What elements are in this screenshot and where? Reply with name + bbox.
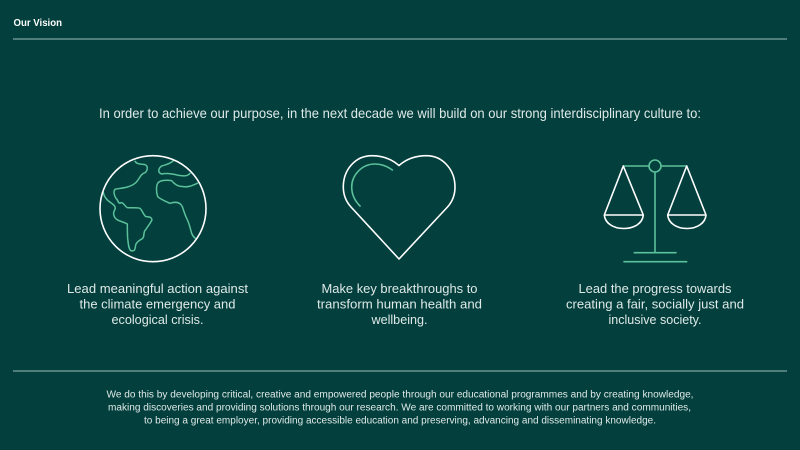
caption: climate: Lead meaningful action against bbox=[67, 281, 248, 296]
caption: climate bbox=[67, 281, 248, 327]
closing paragraph: to being a great employer, providing accessible education and preserving, advancing and disseminating knowledge. bbox=[144, 416, 656, 426]
icon: heart bbox=[343, 156, 455, 259]
caption: health bbox=[317, 281, 482, 327]
caption: society bbox=[566, 281, 744, 327]
closing paragraph: making discoveries and providing solutions through our research. We are committed to working with our partners and communities, bbox=[108, 402, 691, 414]
caption: society: inclusive society. bbox=[608, 312, 702, 327]
heading: Our Vision: Our Vision bbox=[14, 18, 62, 29]
caption: society: Lead the progress towards bbox=[578, 281, 732, 296]
caption: climate: ecological crisis. bbox=[112, 312, 204, 327]
caption: society: creating a fair, socially just and bbox=[566, 296, 744, 312]
intro sentence: In order to achieve our purpose, in the next decade we will build on our strong interdisciplinary culture to: bbox=[99, 105, 701, 121]
closing paragraph: We do this by developing critical, creative and empowered people through our educational programmes and by creating knowledge, bbox=[106, 390, 694, 400]
icon: balance scales bbox=[604, 160, 706, 262]
closing paragraph bbox=[106, 390, 694, 426]
caption: health: wellbeing. bbox=[371, 312, 428, 327]
icon: globe bbox=[100, 156, 206, 262]
caption: climate: the climate emergency and bbox=[80, 296, 236, 312]
caption: health: Make key breakthroughs to bbox=[322, 281, 478, 296]
caption: health: transform human health and bbox=[317, 296, 482, 312]
